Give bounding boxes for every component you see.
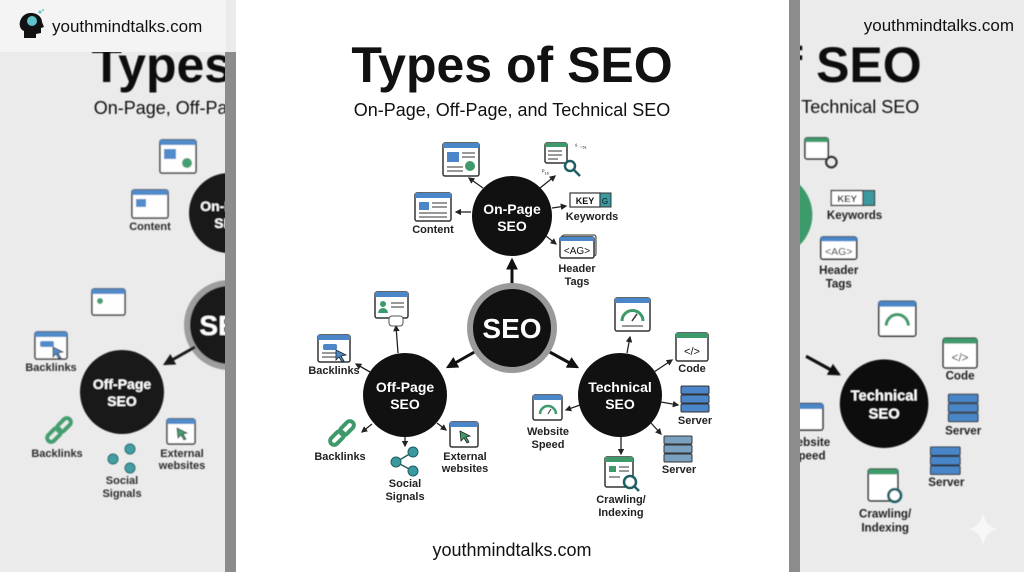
right blurred copy: On-Page, Off-Page, and Technical SEO [603,97,919,117]
label: Social Signals: Social [389,478,421,490]
icon: code: </> [684,346,700,358]
left blurred copy: websites [158,460,205,472]
icon: search [542,143,587,176]
icon: header tags [560,235,596,258]
left blurred copy: Social [106,475,138,487]
label: Backlinks: Backlinks [308,365,360,377]
label: External websites: websites [441,463,488,475]
label: Website Speed: Website [527,426,569,438]
panel edge shadows [225,52,236,572]
icon: search: ᴾ₁₆ [542,169,550,176]
label: Backlinks 2: Backlinks [314,451,366,463]
right blurred copy: Tags [826,278,852,291]
right blurred copy: Types of SEO [600,37,922,93]
right blurred copy: Server [945,424,982,437]
arrow: SEO to Off-Page [448,350,478,367]
right blurred copy: Server [928,476,965,489]
arrow: SEO to Technical [546,350,577,367]
logo bar top-left [0,0,226,52]
icon: speed gauge page [615,298,650,331]
right blurred copy: KEY [837,194,858,205]
icon: header tags: <AG> [564,246,590,257]
right blurred copy: SEO [869,406,900,422]
left blurred copy: SEO [107,393,137,409]
subtitle: On-Page, Off-Page, and Technical SEO [354,100,670,120]
icon: website speed [533,395,562,420]
arrow: SEO to On-Page [510,260,514,284]
logo text: youthmindtalks.com [52,17,202,36]
right blurred copy: Keywords [827,209,882,222]
node: SEO center [470,286,554,370]
label: Crawling/Indexing: Crawling/ [596,494,646,506]
label: Website Speed: Speed [531,439,565,451]
main panel [236,0,789,572]
left blurred copy: External [160,448,204,460]
icon: KEY [570,193,611,207]
icon: search: ⁸ ₋₆₁ [575,143,587,150]
node: Off-Page SEO [308,292,488,503]
node: On-Page SEO [412,143,618,288]
icon: sparkle [968,512,998,546]
node: Off-Page SEO: SEO [390,396,420,412]
icon: server 1 [681,386,709,412]
icon: profile page [375,292,408,326]
icon: head [20,9,44,38]
left blurred copy: SEO [199,310,259,341]
left blurred copy: On-Page [200,198,258,214]
node: Technical SEO: SEO [605,396,635,412]
label: Header Tags: Header [558,263,596,275]
label: Social Signals: Signals [385,491,425,503]
right blurred copy: Header [819,264,859,277]
label: Content: Content [412,224,454,236]
node: Technical SEO: Technical [588,379,652,395]
right blurred copy: Speed [791,450,826,463]
icon: external website [450,422,478,447]
left blurred copy: Content [129,221,171,233]
right blurred copy: </> [952,352,969,365]
left blurred copy: Types of SEO [91,37,413,93]
left blurred copy: SEO [214,215,244,231]
icon: backlinks page [318,335,350,362]
node: Technical SEO [527,298,713,519]
icon: chain link [329,420,355,446]
node: On-Page SEO: SEO [497,218,527,234]
left blurred copy: Off-Page [93,376,151,392]
left blurred copy: Backlinks [25,362,77,374]
footer: youthmindtalks.com [432,540,592,560]
label: Header Tags: Tags [565,276,589,288]
icon: code [676,333,708,361]
left blurred copy: Signals [102,488,142,500]
right watermark text: youthmindtalks.com [864,16,1014,35]
left blurred copy [25,52,225,500]
icon: server 2 [664,436,692,462]
left blurred copy: On-Page, Off-Page, and Technical SEO [94,98,410,118]
right blurred copy [800,44,982,535]
title: Types of SEO [351,37,673,93]
right blurred copy: Technical [851,389,918,405]
icon: crawling [605,457,639,491]
icon: content page [443,143,479,176]
label: Server 2: Server [662,464,697,476]
icon: KEY: KEY [576,196,594,206]
label: Keywords: Keywords [566,211,618,223]
left blurred copy: Backlinks [31,448,83,460]
icon: content [415,193,451,221]
label: Crawling/Indexing: Indexing [598,507,644,519]
node: On-Page SEO: On-Page [483,201,541,217]
label: External websites: External [443,451,487,463]
right blurred copy: Indexing [861,521,909,534]
right blurred copy: Crawling/ [859,508,912,521]
node: SEO center: SEO [482,313,542,344]
label: Code: Code [678,363,706,375]
node: Off-Page SEO: Off-Page [376,379,434,395]
right blurred copy: Website [786,436,831,449]
right blurred copy: <AG> [825,246,853,258]
icon: KEY: G [602,197,608,206]
icon: social share [391,447,418,476]
right blurred copy: Code [946,369,975,382]
label: Server 1: Server [678,415,713,427]
